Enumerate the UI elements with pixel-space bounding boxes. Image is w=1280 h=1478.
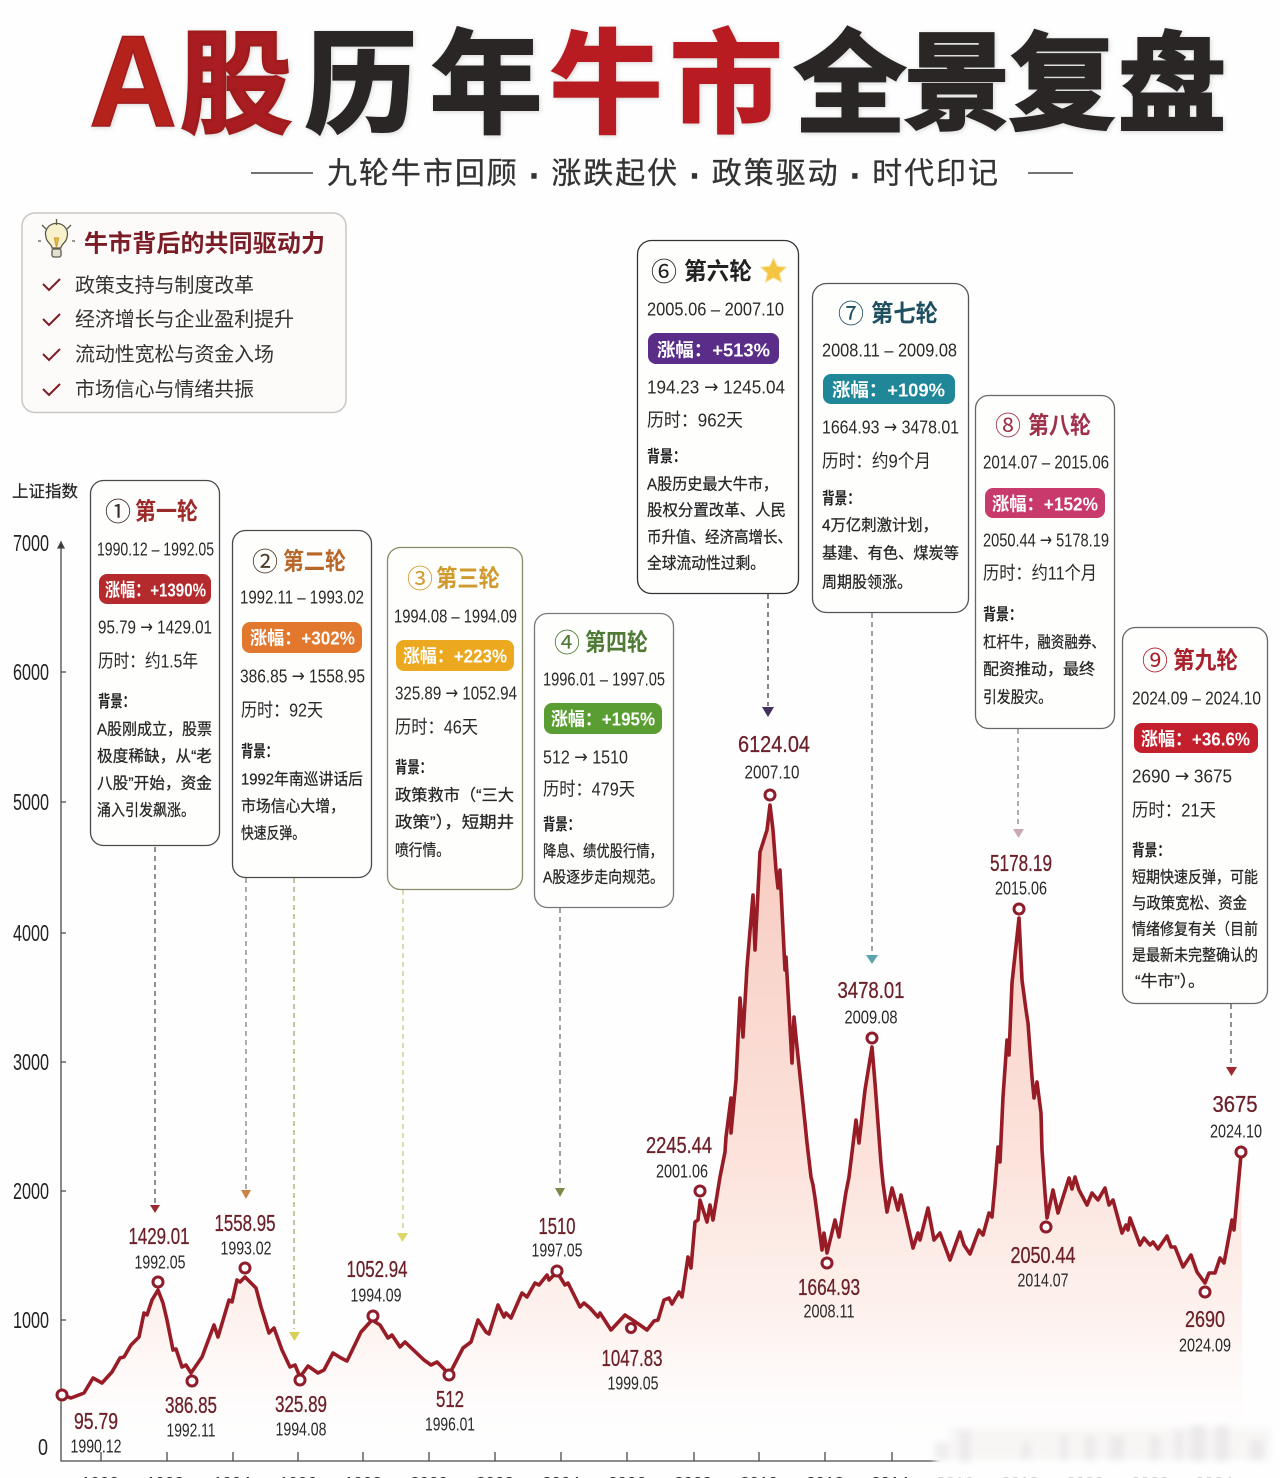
card 3 details: 背景：: [395, 758, 432, 777]
value labels: 1994.09: [350, 1284, 402, 1306]
card 9 details: “牛市”）。: [1135, 972, 1205, 990]
card 3 details: 1994.08 – 1994.09: [394, 606, 517, 626]
title: 股: [180, 22, 292, 148]
y axis labels: 7000: [13, 530, 49, 556]
y axis labels: 3000: [13, 1049, 49, 1075]
y axis labels: 5000: [13, 789, 49, 815]
value labels: 1992.05: [134, 1252, 186, 1272]
card 3 details: 喷行情。: [395, 842, 450, 860]
card 4 heading: [554, 628, 648, 658]
arrow: round 6: [762, 594, 774, 717]
value labels: 2050.44: [1010, 1242, 1076, 1268]
card 4 heading: ④: [554, 628, 580, 658]
title: 牛: [550, 22, 662, 148]
y axis labels: [13, 530, 49, 1460]
list: drivers: 市场信心与情绪共振: [75, 378, 254, 401]
card 4 details: 降息、绩优股行情，: [543, 842, 663, 860]
card 8 heading: 第八轮: [1028, 412, 1091, 440]
arrow: round 1: [150, 847, 160, 1213]
card 2 details: 涨幅：+302%: [250, 628, 355, 648]
card 8 details: 2014.07 – 2015.06: [983, 452, 1109, 472]
value labels: 1994.08: [276, 1418, 326, 1440]
axis label: 上证指数: [12, 482, 78, 501]
area fill under index line: [62, 805, 1243, 1460]
list: drivers: [43, 274, 294, 401]
title: [89, 8, 1226, 154]
card 4 details: 1996.01 – 1997.05: [543, 668, 665, 690]
y axis labels: 4000: [13, 920, 49, 946]
card 6 details: 历时：962天: [647, 410, 743, 430]
value labels: 2245.44: [646, 1132, 712, 1158]
value labels: 2009.08: [844, 1006, 898, 1028]
card 2 details: 市场信心大增，: [241, 798, 345, 816]
y axis labels: 1000: [13, 1307, 49, 1333]
card 4 details: 涨幅：+195%: [551, 708, 655, 730]
title: A: [89, 8, 177, 154]
card 2 details: 历时：92天: [241, 700, 323, 720]
card: round 4: [534, 614, 674, 908]
line chart: Shanghai index: [62, 805, 1241, 1398]
value labels: 386.85: [165, 1392, 217, 1418]
card 6 heading: [651, 257, 752, 287]
card 1 details: A股刚成立，股票: [97, 720, 212, 738]
card 6 details: 194.23 → 1245.04: [647, 376, 785, 398]
subtitle: 九轮牛市回顾 · 涨跌起伏 · 政策驱动 · 时代印记: [327, 158, 998, 190]
card 3 details: [394, 606, 517, 860]
value labels: 5178.19: [990, 850, 1052, 876]
card 6 details: 涨幅：+513%: [657, 340, 770, 360]
card 4 details: 背景：: [543, 815, 580, 834]
card 7 details: 2008.11 – 2009.08: [822, 340, 957, 360]
value labels: 1990.12: [70, 1436, 122, 1456]
card 7 details: 周期股领涨。: [822, 574, 912, 592]
value labels: 2024.10: [1210, 1120, 1262, 1142]
card 9 heading: [1142, 646, 1238, 676]
icon: light bulb: [38, 219, 75, 257]
value labels: [70, 731, 1262, 1456]
card 7 details: [822, 340, 959, 592]
card 9 details: 短期快速反弹，可能: [1132, 868, 1258, 886]
value labels: 1510: [538, 1213, 576, 1239]
arrow: round 2: [241, 878, 251, 1199]
value labels: 2007.10: [744, 762, 800, 782]
value labels: 325.89: [275, 1391, 327, 1417]
card 1 heading: 第一轮: [135, 498, 198, 526]
value labels: 1993.02: [220, 1238, 272, 1258]
card 1 details: 95.79 → 1429.01: [98, 616, 212, 638]
card 4 details: [543, 668, 665, 886]
card 7 details: 1664.93 → 3478.01: [822, 416, 959, 438]
card 2 heading: ②: [252, 547, 278, 577]
card 1 heading: ①: [105, 497, 131, 527]
card 4 details: A股逐步走向规范。: [543, 868, 664, 886]
value labels: 95.79: [74, 1408, 118, 1434]
axes: [58, 542, 1262, 1461]
card 1 details: 背景：: [98, 692, 135, 711]
card: round 8: [976, 396, 1114, 728]
title: 历: [305, 22, 417, 148]
card 8 details: 配资推动，最终: [983, 660, 1095, 678]
card 7 details: 4万亿刺激计划，: [822, 516, 938, 534]
card 9 details: 2690 → 3675: [1132, 766, 1232, 786]
arrow: round 7: [866, 613, 878, 964]
value labels: 1992.11: [166, 1420, 216, 1440]
value labels: 1664.93: [798, 1274, 860, 1300]
card 9 details: 背景：: [1132, 841, 1170, 860]
card 6 details: 2005.06 – 2007.10: [647, 298, 784, 320]
value labels: 512: [436, 1386, 464, 1412]
card 8 details: [983, 452, 1109, 706]
x axis labels: [81, 1474, 1233, 1478]
panel: common drivers: [22, 213, 346, 412]
value labels: 1052.94: [346, 1256, 408, 1282]
markers: [57, 790, 1246, 1400]
card 7 details: 涨幅：+109%: [832, 380, 945, 400]
card 7 details: 历时：约9个月: [822, 450, 931, 472]
card 1 details: 1990.12 – 1992.05: [97, 538, 214, 560]
value labels: 2008.11: [804, 1300, 854, 1322]
card 9 details: 涨幅：+36.6%: [1141, 728, 1250, 750]
card 8 details: 历时：约11个月: [983, 562, 1097, 584]
value labels: 6124.04: [738, 731, 810, 757]
card 2 details: 背景：: [241, 742, 278, 761]
card: round 2: [232, 530, 372, 878]
card: round 7: [812, 284, 968, 612]
value labels: 2690: [1185, 1306, 1225, 1332]
card 4 heading: 第四轮: [585, 630, 648, 656]
card 8 details: 引发股灾。: [983, 688, 1052, 706]
card 6 details: 全球流动性过剩。: [647, 554, 765, 572]
card: round 9: [1122, 628, 1268, 1004]
card 1 details: 涌入引发飙涨。: [97, 802, 195, 820]
value labels: 1558.95: [214, 1210, 276, 1236]
list: drivers: 政策支持与制度改革: [75, 274, 254, 297]
card 7 heading: ⑦: [838, 299, 864, 329]
card: round 3: [388, 548, 522, 890]
card 2 details: 1992年南巡讲话后: [241, 770, 363, 788]
card 8 details: 杠杆牛，融资融券、: [983, 634, 1105, 652]
value labels: 3478.01: [838, 977, 904, 1003]
arrow: round 4: [555, 908, 565, 1197]
card 6 details: 股权分置改革、人民: [647, 502, 786, 520]
card 8 heading: [995, 411, 1091, 441]
card 4 details: 512 → 1510: [543, 746, 628, 768]
card 1 heading: [105, 497, 198, 527]
card 3 heading: [407, 564, 500, 594]
card 1 details: 涨幅：+1390%: [105, 580, 206, 600]
card 8 details: 2050.44 → 5178.19: [983, 530, 1109, 550]
value labels: 2015.06: [995, 878, 1047, 898]
card 1 details: 极度稀缺，从“老: [97, 748, 212, 766]
panel heading: 牛市背后的共同驱动力: [84, 230, 325, 258]
card 6 heading: 第六轮: [684, 258, 752, 286]
card 6 details: 背景：: [647, 447, 686, 466]
card 1 details: 八股”开始，资金: [97, 774, 212, 792]
card 8 details: 涨幅：+152%: [992, 494, 1098, 514]
card 3 heading: ③: [407, 564, 433, 594]
card 7 details: 基建、有色、煤炭等: [822, 544, 959, 562]
card 3 heading: 第三轮: [436, 566, 500, 592]
arrow: round 3 to 325.89: [289, 878, 300, 1341]
card: round 6: [638, 240, 798, 594]
title: 盘: [1118, 24, 1226, 146]
value labels: 2001.06: [656, 1160, 708, 1182]
y axis labels: 2000: [13, 1178, 49, 1204]
card 2 heading: [252, 547, 346, 577]
title: 景: [904, 26, 1010, 144]
card 1 details: [97, 538, 214, 820]
card 2 details: 386.85 → 1558.95: [240, 666, 365, 686]
card 3 details: 历时：46天: [395, 716, 478, 738]
card 9 details: 与政策宽松、资金: [1132, 894, 1247, 912]
card 2 heading: 第二轮: [283, 548, 346, 576]
icon: star: [761, 258, 786, 282]
value labels: 1996.01: [425, 1414, 475, 1434]
value labels: 1047.83: [602, 1345, 662, 1371]
y axis labels: 0: [38, 1434, 48, 1460]
value labels: 1429.01: [128, 1223, 190, 1249]
card 2 details: 1992.11 – 1993.02: [240, 586, 364, 608]
value labels: 2014.07: [1018, 1270, 1068, 1290]
card 6 heading: ⑥: [651, 257, 677, 287]
card 9 heading: ⑨: [1142, 646, 1168, 676]
list: drivers: 经济增长与企业盈利提升: [75, 308, 294, 331]
card 8 details: 背景：: [983, 605, 1022, 624]
list: drivers: 流动性宽松与资金入场: [75, 343, 274, 366]
card 1 details: 历时：约1.5年: [98, 650, 198, 672]
card 7 heading: 第七轮: [871, 300, 938, 328]
card 7 details: 背景：: [822, 489, 860, 508]
card 9 details: [1132, 688, 1261, 990]
y axis labels: 6000: [13, 659, 49, 685]
title: 全: [794, 22, 906, 148]
arrow: round 9: [1226, 1004, 1237, 1076]
value labels: 3675: [1212, 1091, 1258, 1117]
card 6 details: 币升值、经济高增长、: [647, 528, 792, 546]
title: 年: [430, 22, 542, 148]
value labels: 1997.05: [532, 1240, 582, 1260]
arrow: round 3: [397, 890, 408, 1242]
card: round 1: [90, 480, 220, 846]
card 3 details: 325.89 → 1052.94: [395, 682, 517, 704]
card 8 heading: ⑧: [995, 411, 1021, 441]
card 9 details: 情绪修复有关（目前: [1132, 920, 1258, 938]
card 2 details: [240, 586, 365, 842]
card 6 details: [647, 298, 792, 572]
title: 市: [670, 22, 782, 148]
card 3 details: 政策”），短期井: [395, 814, 514, 832]
card 9 heading: 第九轮: [1173, 648, 1238, 674]
blurred watermark: [935, 1425, 1270, 1478]
card 6 details: A股历史最大牛市，: [647, 476, 778, 494]
card 9 details: 是最新未完整确认的: [1132, 946, 1258, 964]
card 4 details: 历时：479天: [543, 778, 635, 800]
value labels: 2024.09: [1179, 1334, 1231, 1356]
card 9 details: 历时：21天: [1132, 800, 1216, 820]
card 2 details: 快速反弹。: [241, 824, 305, 842]
arrow: round 8: [1013, 729, 1024, 838]
card 7 heading: [838, 299, 938, 329]
title: 复: [1009, 26, 1115, 144]
card 3 details: 政策救市（“三大: [395, 786, 514, 804]
value labels: 1999.05: [608, 1372, 658, 1394]
card 3 details: 涨幅：+223%: [403, 646, 507, 666]
